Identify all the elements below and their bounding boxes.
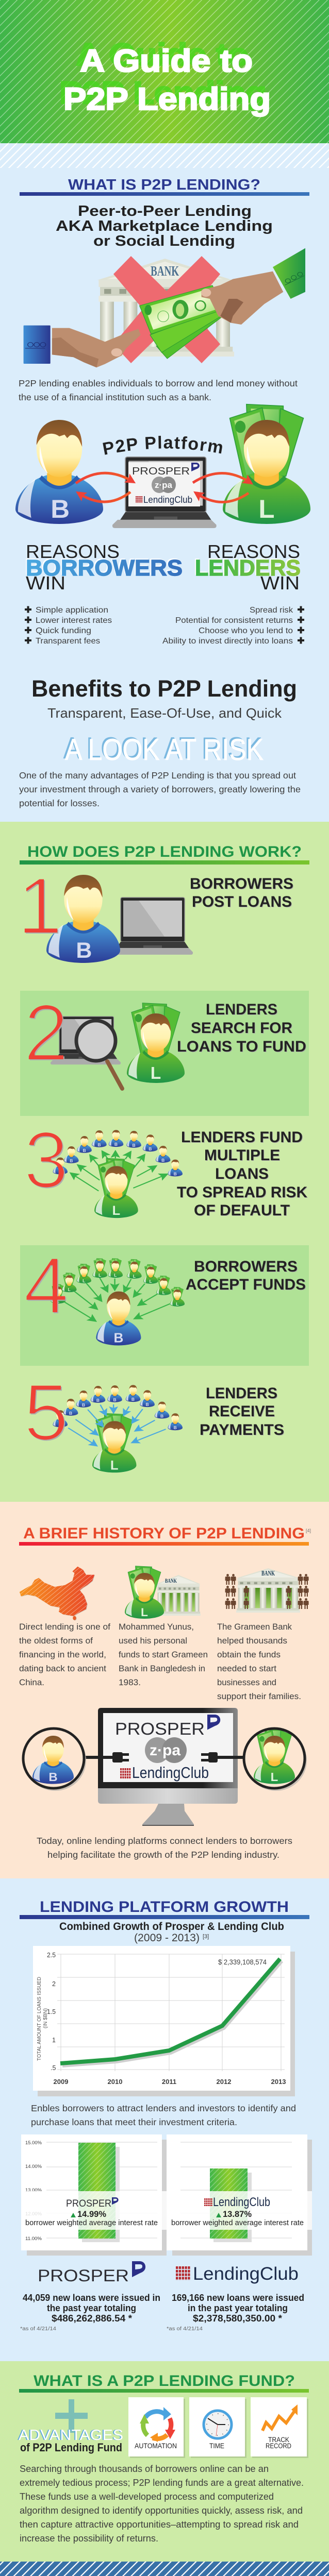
panel: reasons borrowers win: Lower interest rates xyxy=(36,616,112,625)
panel: reasons lenders win: Potential for consistent returns xyxy=(175,616,293,625)
step 2: lenders search for loans: LENDERS xyxy=(206,1001,277,1018)
step 3: lenders fund multiple loans: B xyxy=(161,1158,164,1163)
text: lending fund description: These funds use a well-developed process and computerized xyxy=(20,2492,274,2502)
step 2: lenders search for loans: 2 xyxy=(24,988,69,1078)
bar chart: Prosper interest rate: PROSPER xyxy=(66,2198,111,2209)
icon: crossed out bank with hands exchanging money xyxy=(24,248,305,367)
step 3: lenders fund multiple loans: B xyxy=(97,1142,101,1147)
panel: reasons borrowers win: Simple application xyxy=(36,606,108,615)
heading: a brief history of P2P lending: [4] xyxy=(306,1528,311,1533)
step 5: lenders receive payments: RECEIVE xyxy=(209,1403,275,1420)
text: Mohammed Yunus: Bank in Bangledesh in xyxy=(119,1664,205,1673)
step 4: borrowers accept funds: 4 xyxy=(24,1241,69,1331)
chart title: [3] xyxy=(203,1934,209,1940)
bar chart: Lending Club interest rate xyxy=(167,2134,312,2256)
step 3: lenders fund multiple loans: B xyxy=(174,1172,177,1176)
logo: Prosper xyxy=(38,2261,145,2285)
icon: lender xyxy=(223,404,310,524)
step 5: lenders receive payments: B xyxy=(96,1398,100,1403)
panel: reasons lenders win: LENDERS xyxy=(195,555,301,581)
text: Grameen bank: support their families. xyxy=(217,1691,301,1701)
step 3: lenders fund multiple loans: 3 xyxy=(24,1115,69,1205)
text: P2P definition: P2P lending enables individuals to borrow and lend money without xyxy=(19,378,298,388)
line chart: combined growth: 2 xyxy=(52,1980,56,1988)
step 4: borrowers accept funds: L xyxy=(133,1274,136,1279)
icon: monitor with platform logos and plugged in people: PROSPER xyxy=(115,1719,205,1738)
step 4: borrowers accept funds: B xyxy=(113,1330,123,1345)
step 3: lenders fund multiple loans: LENDERS FUND xyxy=(181,1129,303,1146)
stat: Lending Club loans: 169,166 new loans were issued xyxy=(172,2293,304,2303)
text: Mohammed Yunus: 1983. xyxy=(119,1677,141,1687)
heading: lending platform growth: LENDING PLATFORM GROWTH xyxy=(40,1899,289,1916)
step 4: borrowers accept funds: L xyxy=(150,1279,152,1284)
text: enables borrowers: purchase loans that meet their investment criteria. xyxy=(31,2117,237,2127)
step 3: lenders fund multiple loans: B xyxy=(59,1170,62,1174)
advantages label with plus: of P2P Lending Fund xyxy=(20,2441,122,2454)
card: track record xyxy=(251,2397,308,2458)
icon: Grameen bank with crowd: BANK xyxy=(261,1570,275,1578)
icon: Grameen bank with crowd xyxy=(225,1568,309,1613)
card: time xyxy=(189,2397,246,2458)
line chart: combined growth: TOTAL AMOUNT OF LOANS ISSUED xyxy=(36,1977,42,2061)
line chart: combined growth: 2009 xyxy=(54,2078,68,2086)
step 3: lenders fund multiple loans: TO SPREAD RISK xyxy=(177,1184,307,1201)
title xyxy=(63,43,271,116)
icon: map of China xyxy=(20,1567,94,1620)
subheading: peer to peer lending xyxy=(56,203,273,249)
text: direct lending xyxy=(19,1622,110,1687)
step 3: lenders fund multiple loans: B xyxy=(83,1148,86,1153)
icon: laptop with platforms xyxy=(112,457,217,528)
step 3: lenders fund multiple loans: B xyxy=(149,1146,152,1151)
panel: brief history xyxy=(0,1502,329,1878)
subheading: peer to peer lending: or Social Lending xyxy=(93,233,235,249)
bar chart: Lending Club interest rate: 13.87% xyxy=(223,2210,252,2219)
stat: Lending Club loans: *as of 4/21/14 xyxy=(167,2326,203,2332)
text: P2P definition xyxy=(19,378,298,402)
panel: how does P2P lending work xyxy=(0,822,329,1502)
stat: Lending Club loans: in the past year totaling xyxy=(188,2303,288,2313)
step 4: borrowers accept funds: L xyxy=(162,1290,165,1295)
text: Grameen bank: helped thousands xyxy=(217,1636,287,1646)
panel: reasons lenders win xyxy=(162,541,304,646)
step 5: lenders receive payments: B xyxy=(59,1422,62,1427)
line chart: combined growth: 2010 xyxy=(108,2078,122,2086)
panel: lending platform growth xyxy=(0,1878,329,2361)
text: lending fund description xyxy=(20,2464,304,2544)
card: automation: AUTOMATION xyxy=(135,2442,177,2450)
panel: reasons lenders win: REASONS xyxy=(207,541,300,562)
text: today online lending platforms: Today, online lending platforms connect lenders to borrowers xyxy=(37,1836,292,1846)
text: Mohammed Yunus: used his personal xyxy=(119,1636,187,1646)
text: lending fund description: then capture attractive opportunities–attempting to spread risk and xyxy=(20,2519,299,2530)
chart title: (2009 - 2013) xyxy=(134,1932,200,1944)
line chart: combined growth: $ 2,339,108,574 xyxy=(218,1958,267,1966)
step 3: lenders fund multiple loans xyxy=(24,1115,307,1219)
card: time: TIME xyxy=(209,2442,224,2450)
step 1: borrowers post loans xyxy=(18,861,293,963)
step 4: borrowers accept funds: L xyxy=(176,1301,178,1307)
text: enables borrowers xyxy=(31,2103,296,2127)
panel: reasons lenders win: Ability to invest directly into loans xyxy=(162,637,293,646)
line chart: combined growth: 2012 xyxy=(217,2078,231,2086)
icon: laptop with platforms: LendingClub xyxy=(143,495,192,505)
text: risk paragraph: One of the many advantages of P2P Lending is that you spread out xyxy=(19,770,296,781)
bar chart: Prosper interest rate xyxy=(21,2134,167,2256)
panel: what is a P2P lending fund xyxy=(0,2361,329,2562)
advantages label with plus: ADVANTAGES xyxy=(19,2427,123,2444)
step 3: lenders fund multiple loans: OF DEFAULT xyxy=(194,1202,290,1219)
line chart: combined growth: 1 xyxy=(52,2037,56,2044)
heading: benefits: Benefits to P2P Lending xyxy=(31,675,297,702)
bar chart: Prosper interest rate: 15.00% xyxy=(25,2140,42,2146)
text: Grameen bank xyxy=(217,1622,301,1701)
step 4: borrowers accept funds: L xyxy=(57,1298,59,1303)
text: lending fund description: Searching through thousands of borrowers online can be an xyxy=(20,2464,269,2474)
stat: Prosper loans: the past year totaling xyxy=(47,2303,136,2313)
step 5: lenders receive payments: PAYMENTS xyxy=(200,1421,284,1438)
icon: lender and bank: L xyxy=(141,1606,148,1619)
step 5: lenders receive payments: B xyxy=(113,1397,117,1402)
step 4: borrowers accept funds: L xyxy=(68,1287,71,1292)
icon: lender and bank: BANK xyxy=(165,1577,177,1584)
step 4: borrowers accept funds: L xyxy=(114,1273,117,1278)
icon: monitor with platform logos and plugged in people: L xyxy=(271,1771,278,1784)
panel: reasons lenders win: Choose who you lend to xyxy=(199,626,293,635)
line chart: combined growth: .5 xyxy=(51,2064,56,2072)
step 5: lenders receive payments: B xyxy=(174,1425,177,1430)
line chart: combined growth: 2013 xyxy=(271,2078,286,2086)
step 5: lenders receive payments: B xyxy=(69,1411,72,1416)
text: direct lending: dating back to ancient xyxy=(19,1664,106,1673)
panel: reasons borrowers win xyxy=(25,541,183,646)
step 5: lenders receive payments: B xyxy=(82,1402,85,1408)
step 5: lenders receive payments: B xyxy=(160,1414,163,1418)
step 3: lenders fund multiple loans: B xyxy=(114,1142,118,1147)
diagram: P2P platform connecting borrower and lender xyxy=(15,404,310,528)
heading: benefits xyxy=(31,675,297,721)
bar chart: Prosper interest rate: 13.00% xyxy=(25,2188,42,2193)
icon: crossed out bank with hands exchanging money: BANK xyxy=(151,263,179,279)
line chart: combined growth: (IN $BN) xyxy=(42,2008,48,2028)
card: automation xyxy=(128,2397,185,2458)
text: Mohammed Yunus: funds to start Grameen xyxy=(119,1650,208,1659)
step 1: borrowers post loans: 1 xyxy=(18,861,62,951)
chart title: Combined Growth of Prosper & Lending Club xyxy=(59,1921,284,1933)
text: Grameen bank: obtain the funds xyxy=(217,1650,281,1659)
text: lending fund description: extremely tedious process; P2P lending funds are a great alternative. xyxy=(20,2478,304,2488)
heading: what is a P2P lending fund: WHAT IS A P2P LENDING FUND? xyxy=(34,2372,295,2389)
text: today online lending platforms xyxy=(37,1836,292,1860)
step 5: lenders receive payments: 5 xyxy=(24,1368,69,1458)
bar chart: Prosper interest rate: 14.99% xyxy=(77,2210,106,2219)
panel: reasons borrowers win: WIN xyxy=(26,572,65,594)
panel: reasons borrowers win: BORROWERS xyxy=(26,555,183,581)
icon: lender and bank xyxy=(125,1566,201,1619)
icon: borrower xyxy=(15,420,103,524)
text: direct lending: China. xyxy=(19,1677,44,1687)
panel: reasons borrowers win: REASONS xyxy=(26,541,120,562)
step 1: borrowers post loans: POST LOANS xyxy=(192,893,292,910)
step 2: lenders search for loans xyxy=(24,988,306,1089)
step 1: borrowers post loans: BORROWERS xyxy=(190,875,293,892)
step 5: lenders receive payments: B xyxy=(146,1402,149,1407)
text: risk paragraph: your investment through a variety of borrowers, greatly lowering the xyxy=(19,784,301,794)
text: lending fund description: increase the possibility of returns. xyxy=(20,2533,158,2544)
step 3: lenders fund multiple loans: B xyxy=(70,1158,73,1163)
subheading: peer to peer lending: Peer-to-Peer Lending xyxy=(78,203,252,219)
step 2: lenders search for loans: L xyxy=(151,1064,161,1083)
step 5: lenders receive payments xyxy=(24,1368,284,1472)
bar chart: Prosper interest rate: 11.00% xyxy=(25,2236,42,2242)
step 5: lenders receive payments: B xyxy=(131,1397,135,1402)
panel: footer xyxy=(0,2562,329,2576)
card: track record: TRACK xyxy=(268,2436,289,2444)
panel: reasons lenders win: WIN xyxy=(260,572,300,594)
step 3: lenders fund multiple loans: LOANS xyxy=(215,1165,269,1182)
step 2: lenders search for loans: SEARCH FOR xyxy=(191,1020,292,1037)
heading: how does P2P lending work: HOW DOES P2P LENDING WORK? xyxy=(27,843,302,860)
line chart: combined growth xyxy=(33,1946,295,2096)
stat: Prosper loans xyxy=(20,2293,160,2332)
step 4: borrowers accept funds: BORROWERS xyxy=(194,1258,298,1275)
bar chart: Prosper interest rate: 14.00% xyxy=(25,2164,42,2170)
panel: reasons borrowers win: Transparent fees xyxy=(36,637,100,646)
text: direct lending: Direct lending is one of xyxy=(19,1622,110,1632)
text: Grameen bank: needed to start xyxy=(217,1664,276,1673)
bar chart: Lending Club interest rate: LendingClub xyxy=(213,2195,270,2209)
step 1: borrowers post loans: B xyxy=(76,938,92,963)
heading: what is P2P lending xyxy=(20,177,309,196)
text: enables borrowers: Enbles borrowers to attract lenders and investors to identify and xyxy=(31,2103,296,2113)
step 5: lenders receive payments: LENDERS xyxy=(206,1385,277,1402)
chart title xyxy=(59,1921,284,1944)
stat: Prosper loans: *as of 4/21/14 xyxy=(20,2326,56,2332)
icon: laptop with platforms: z·pa xyxy=(155,480,173,490)
icon: monitor with platform logos and plugged in people: LendingClub xyxy=(132,1764,209,1782)
step 3: lenders fund multiple loans: MULTIPLE xyxy=(204,1147,280,1164)
text: P2P definition: the use of a financial institution such as a bank. xyxy=(19,392,211,402)
icon: laptop with platforms: PROSPER xyxy=(132,466,190,477)
panel: header xyxy=(0,0,329,143)
text: today online lending platforms: helping facilitate the growth of the P2P lending industry. xyxy=(47,1850,279,1860)
icon: monitor with platform logos and plugged in people: B xyxy=(48,1771,58,1784)
text: Mohammed Yunus xyxy=(119,1622,208,1687)
title: P2P Lending xyxy=(63,81,271,116)
panel: what is P2P lending xyxy=(0,143,329,822)
step 4: borrowers accept funds: ACCEPT FUNDS xyxy=(186,1276,306,1293)
text: direct lending: financing in the world, xyxy=(19,1650,106,1659)
title: A Guide to xyxy=(80,43,253,78)
icon: monitor with platform logos and plugged in people xyxy=(23,1708,307,1826)
step 2: lenders search for loans: LOANS TO FUND xyxy=(177,1038,306,1055)
text: Grameen bank: The Grameen Bank xyxy=(217,1622,292,1632)
advantages label with plus xyxy=(19,2399,123,2454)
stat: Lending Club loans xyxy=(167,2293,304,2332)
step 3: lenders fund multiple loans: B xyxy=(133,1143,136,1148)
step 4: borrowers accept funds: L xyxy=(83,1278,85,1283)
line chart: combined growth: 2011 xyxy=(162,2078,176,2086)
text: risk paragraph xyxy=(19,770,301,808)
stat: Prosper loans: 44,059 new loans were issued in xyxy=(23,2293,160,2303)
step 4: borrowers accept funds: L xyxy=(98,1273,101,1278)
icon: lender: L xyxy=(258,494,275,523)
bar chart: Prosper interest rate: borrower weighted average interest rate xyxy=(25,2218,158,2227)
logo: Prosper: PROSPER xyxy=(38,2266,129,2285)
stat: Lending Club loans: $2,378,580,350.00 * xyxy=(193,2313,282,2324)
logo: Lending Club: LendingClub xyxy=(193,2264,299,2284)
step 3: lenders fund multiple loans: L xyxy=(112,1204,120,1218)
text: risk paragraph: potential for losses. xyxy=(19,798,100,808)
step 5: lenders receive payments: L xyxy=(110,1459,119,1472)
line chart: combined growth: 2.5 xyxy=(47,1952,56,1959)
heading: a brief history of P2P lending: A BRIEF HISTORY OF P2P LENDING xyxy=(23,1525,305,1542)
text: Grameen bank: businesses and xyxy=(217,1677,276,1687)
diagram: P2P platform connecting borrower and lender: P2P Platform xyxy=(103,436,222,455)
heading: lending platform growth xyxy=(20,1899,309,1919)
line chart: combined growth: 1.5 xyxy=(47,2008,56,2015)
bar chart: Prosper interest rate: 12.00% xyxy=(25,2211,42,2217)
text: direct lending: the oldest forms of xyxy=(19,1636,93,1646)
heading: benefits: Transparent, Ease-Of-Use, and Quick xyxy=(47,705,282,721)
panel: reasons borrowers win: Quick funding xyxy=(36,626,91,635)
heading: what is P2P lending: WHAT IS P2P LENDING? xyxy=(68,177,260,193)
card: track record: RECORD xyxy=(266,2442,291,2450)
heading: a look at risk: A LOOK AT RISK xyxy=(65,733,264,767)
text: Mohammed Yunus: Mohammed Yunus, xyxy=(119,1622,194,1632)
icon: borrower: B xyxy=(51,494,70,523)
stat: Prosper loans: $486,262,886.54 * xyxy=(52,2313,132,2324)
text: lending fund description: algorithm designed to identify opportunities quickly, assess risk, and xyxy=(20,2505,303,2516)
bar chart: Lending Club interest rate: borrower weighted average interest rate xyxy=(171,2218,304,2227)
step 4: borrowers accept funds xyxy=(24,1241,306,1345)
icon: monitor with platform logos and plugged in people: z·pa xyxy=(150,1742,180,1759)
panel: reasons lenders win: Spread risk xyxy=(250,606,293,615)
subheading: peer to peer lending: AKA Marketplace Lending xyxy=(56,218,273,234)
arrows: flow between people and platform xyxy=(76,473,251,502)
